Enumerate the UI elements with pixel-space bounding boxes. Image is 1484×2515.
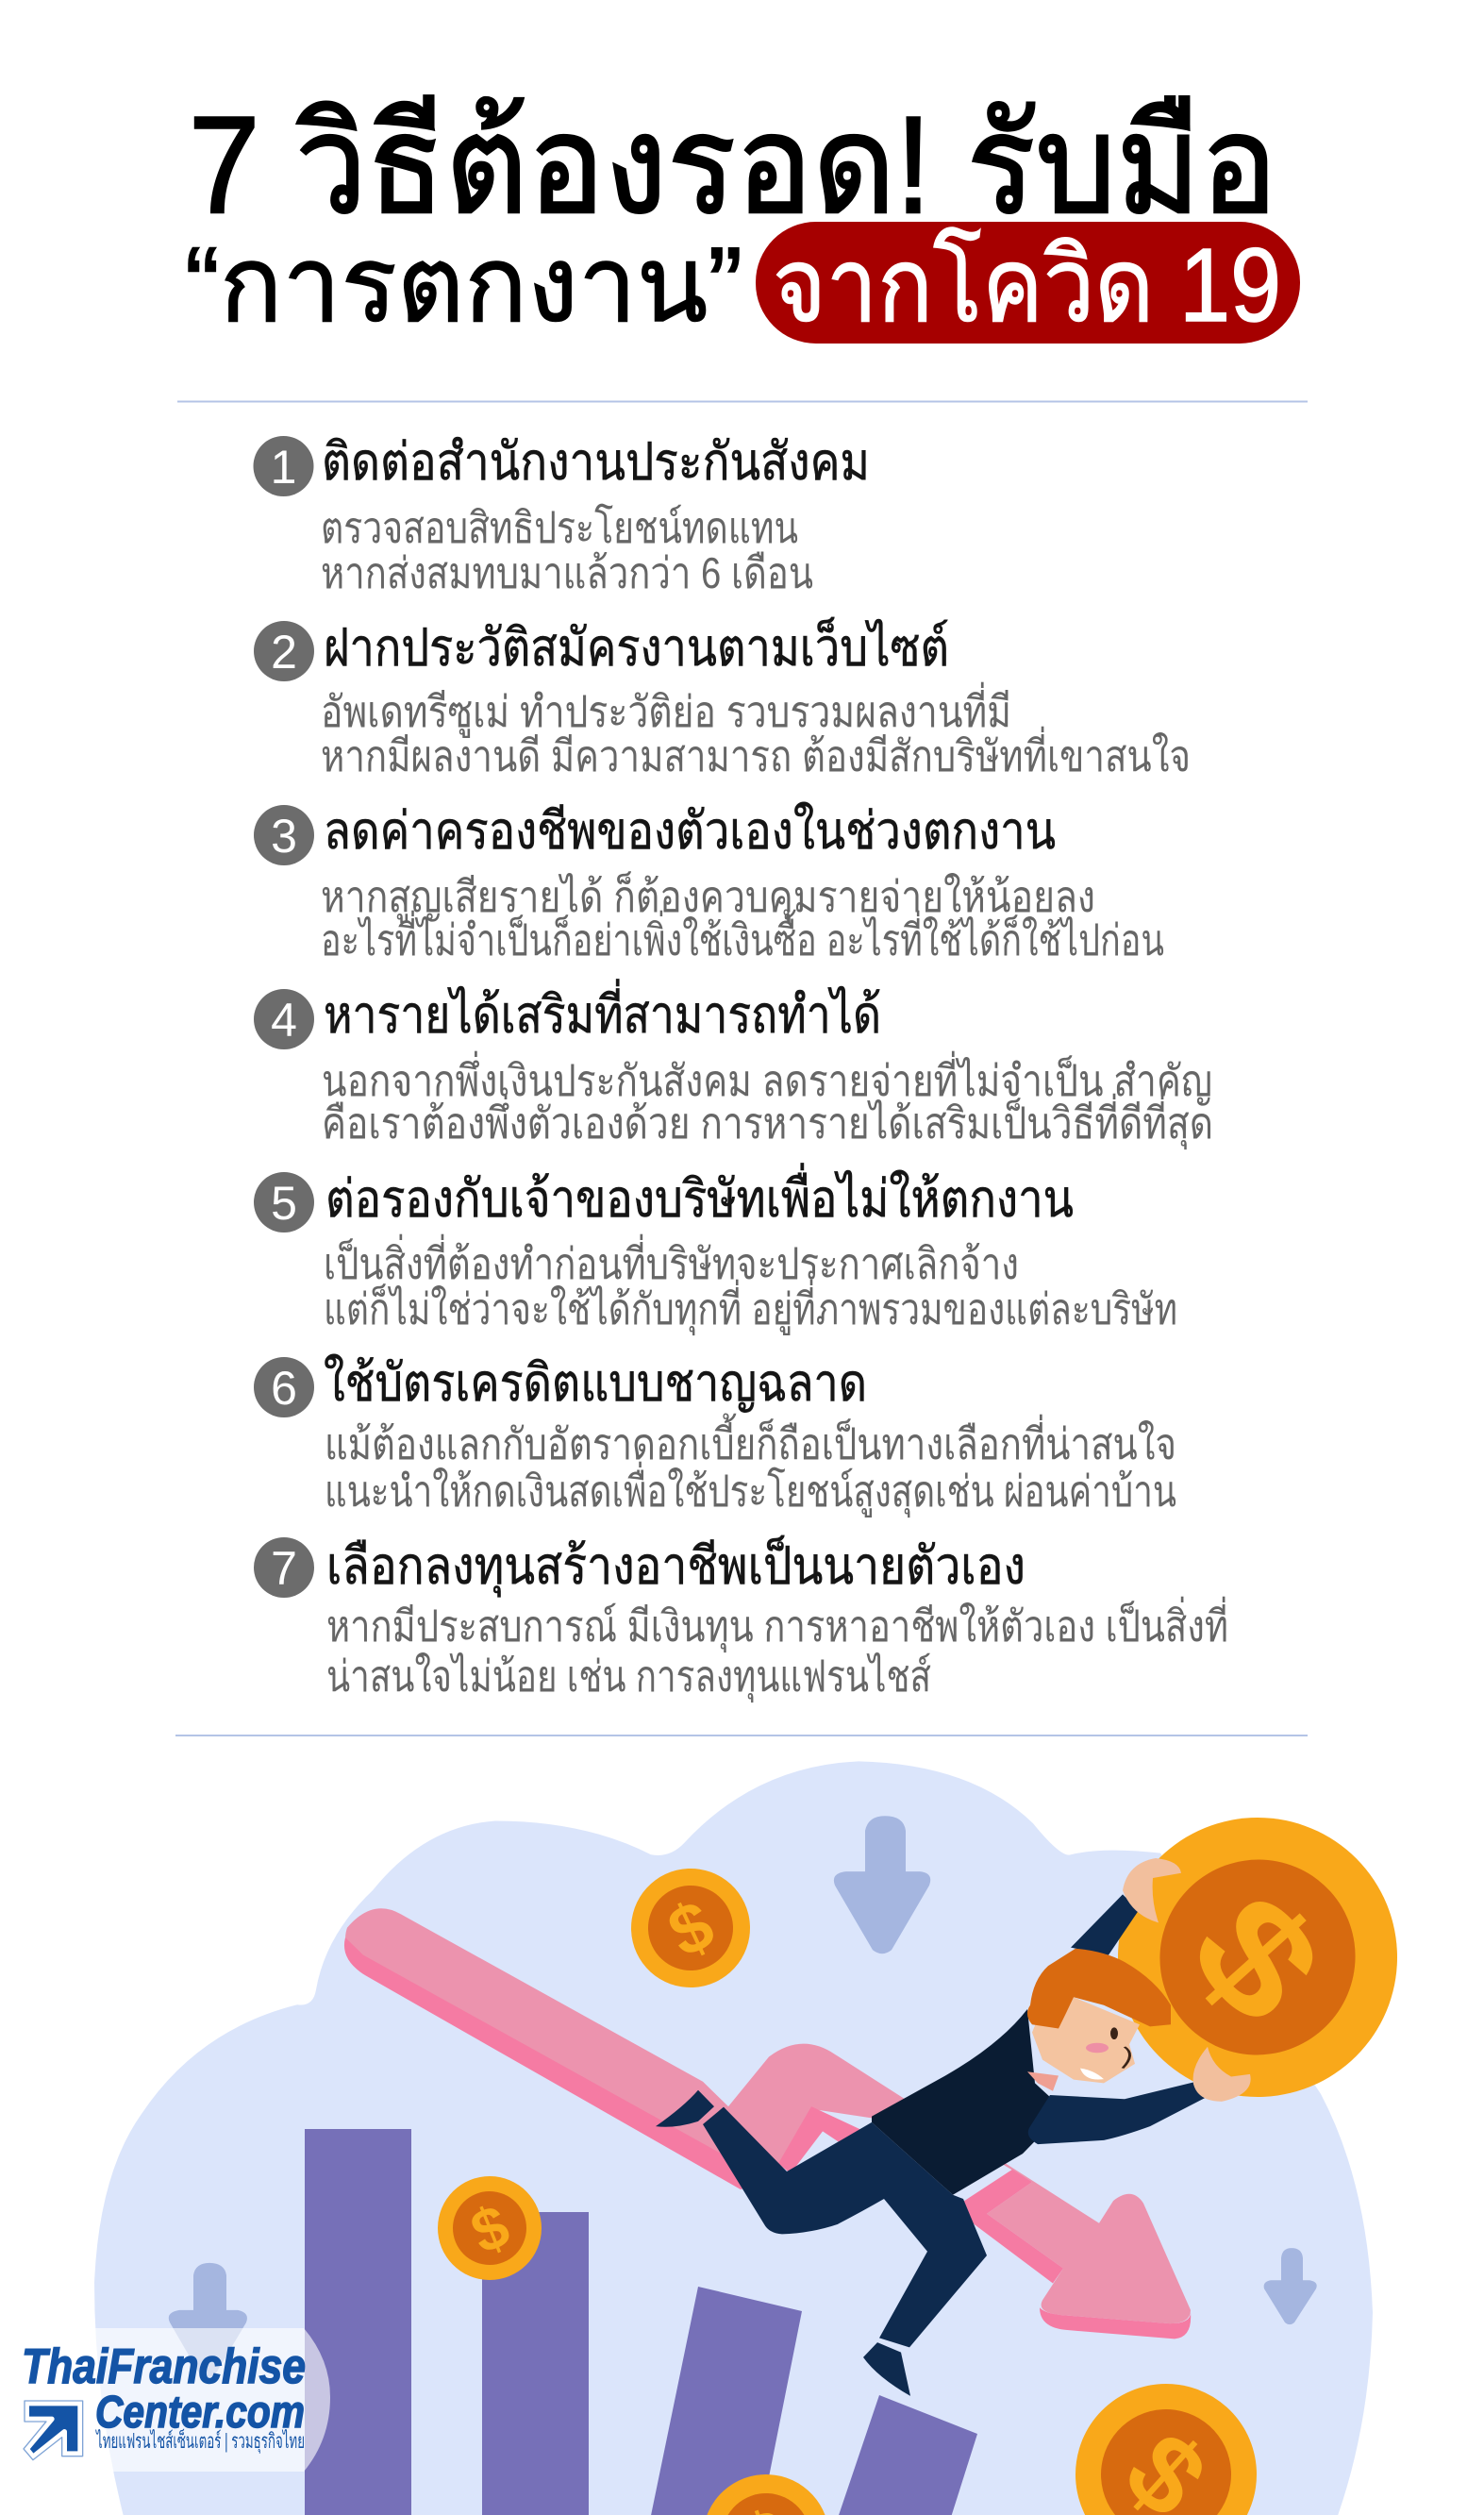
down arrow large	[834, 1816, 930, 1953]
title line 1: 7 วิธีต้องรอด! รับมือ	[189, 88, 1277, 242]
item 7	[254, 1535, 1228, 1703]
logo: ThaiFranchise Center: ThaiFranchise	[22, 2339, 306, 2394]
large coin	[1060, 1760, 1455, 2155]
coin bottom right	[1038, 2346, 1294, 2515]
coin on bar	[422, 2160, 558, 2296]
item 4	[254, 979, 1213, 1150]
cloud background	[94, 1761, 1373, 2515]
down arrow left	[169, 2263, 247, 2377]
item 2: 2	[271, 626, 297, 679]
item 1	[253, 432, 870, 597]
item 3	[254, 801, 1164, 964]
item 6	[254, 1353, 1176, 1518]
neck	[1027, 2071, 1059, 2091]
item 4: 4	[271, 994, 297, 1047]
face	[1032, 1993, 1140, 2083]
shoe upper	[656, 2090, 714, 2127]
logo: ThaiFranchise Center	[22, 2328, 330, 2472]
title line 2: “การตกงาน”	[185, 226, 742, 344]
logo arrow icon	[24, 2401, 83, 2460]
raised arm	[1071, 1894, 1139, 1955]
item 7: น่าสนใจไม่น้อย เช่น การลงทุนแฟรนไชส์	[326, 1652, 931, 1703]
shoe lower	[863, 2342, 910, 2396]
arrow light face	[345, 1908, 1191, 2323]
item 7: หากมีประสบการณ์ มีเงินทุน การหาอาชีพให้ตัวเอง เป็นสิ่งที่	[326, 1596, 1228, 1653]
item 6: 6	[271, 1362, 297, 1415]
hair	[1027, 1949, 1171, 2028]
item 5	[254, 1163, 1177, 1336]
panel: seven ways list	[253, 432, 1228, 1703]
item 6: แม้ต้องแลกกับอัตราดอกเบี้ยก็ถือเป็นทางเลือกที่น่าสนใจ	[325, 1413, 1176, 1468]
large coin: $	[1158, 1861, 1357, 2054]
item 5: 5	[271, 1177, 297, 1230]
item 3: ลดค่าครองชีพของตัวเองในช่วงตกงาน	[324, 801, 1056, 860]
sweater torso	[872, 2009, 1050, 2195]
sleeve arm	[1028, 2082, 1207, 2144]
item 7: 7	[271, 1542, 297, 1595]
hand on top of coin	[1123, 1858, 1181, 1922]
item 5: ต่อรองกับเจ้าของบริษัทเพื่อไม่ให้ตกงาน	[325, 1163, 1074, 1228]
title	[185, 88, 1300, 344]
item 4: นอกจากพึ่งเงินประกันสังคม ลดรายจ่ายที่ไม่จำเป็น สำคัญ	[322, 1050, 1212, 1105]
item 2: หากมีผลงานดี มีความสามารถ ต้องมีสักบริษัทที่เขาสนใจ	[321, 726, 1191, 780]
ear nose mouth details	[1049, 1989, 1130, 2080]
item 5: แต่ก็ไม่ใช่ว่าจะใช้ได้กับทุกที่ อยู่ที่ภาพรวมของแต่ละบริษัท	[324, 1279, 1177, 1336]
item 2: ฝากประวัติสมัครงานตามเว็บไซต์	[324, 617, 949, 677]
item 7: เลือกลงทุนสร้างอาชีพเป็นนายตัวเอง	[326, 1535, 1025, 1598]
hand below coin	[1193, 2047, 1251, 2102]
item 2	[254, 617, 1191, 780]
coin small top: $	[657, 1885, 725, 1972]
logo: ThaiFranchise Center: Center.com	[95, 2388, 305, 2438]
pink down trend arrow	[344, 1908, 1191, 2339]
item 1: ติดต่อสำนักงานประกันสังคม	[322, 432, 870, 491]
item 1: ตรวจสอบสิทธิประโยชน์ทดแทน	[321, 503, 798, 552]
item 1: หากส่งสมทบมาแล้วกว่า 6 เดือน	[321, 548, 813, 597]
item 3: อะไรที่ไม่จำเป็นก็อย่าเพิ่งใช้เงินซื้อ อะไรที่ใช้ได้ก็ใช้ไปก่อน	[321, 909, 1164, 964]
item 3: 3	[271, 810, 297, 863]
down arrow right	[1264, 2248, 1317, 2324]
businessman falling	[656, 1858, 1251, 2396]
trousers	[703, 2107, 987, 2347]
coin bottom centre	[685, 2456, 847, 2515]
item 5: เป็นสิ่งที่ต้องทำก่อนที่บริษัทจะประกาศเลิกจ้าง	[324, 1233, 1019, 1288]
coin on bar: $	[461, 2191, 518, 2267]
item 6: ใช้บัตรเครดิตแบบชาญฉลาด	[324, 1353, 867, 1413]
logo: ThaiFranchise Center: ไทยแฟรนไชส์เซ็นเตอร์ | รวมธุรกิจไทย	[95, 2427, 305, 2454]
bar chart declining	[305, 2129, 977, 2515]
item 1: 1	[271, 441, 296, 494]
item 6: แนะนำให้กดเงินสดเพื่อใช้ประโยชน์สูงสุดเช่น ผ่อนค่าบ้าน	[325, 1461, 1176, 1518]
item 4: คือเราต้องพึ่งตัวเองด้วย การหารายได้เสริมเป็นวิธีที่ดีที่สุด	[322, 1093, 1213, 1150]
item 4: หารายได้เสริมที่สามารถทำได้	[324, 979, 881, 1044]
arrow dark edges	[344, 1937, 1191, 2339]
coin small top	[611, 1849, 770, 2007]
item 3: หากสูญเสียรายได้ ก็ต้องควบคุมรายจ่ายให้น้อยลง	[321, 871, 1095, 924]
item 2: อัพเดทรีซูเม่ ทำประวัติย่อ รวบรวมผลงานที่มี	[321, 681, 1011, 738]
red pill: from covid 19: จากโควิด 19	[773, 227, 1281, 344]
illustration: falling economy	[94, 1760, 1455, 2515]
